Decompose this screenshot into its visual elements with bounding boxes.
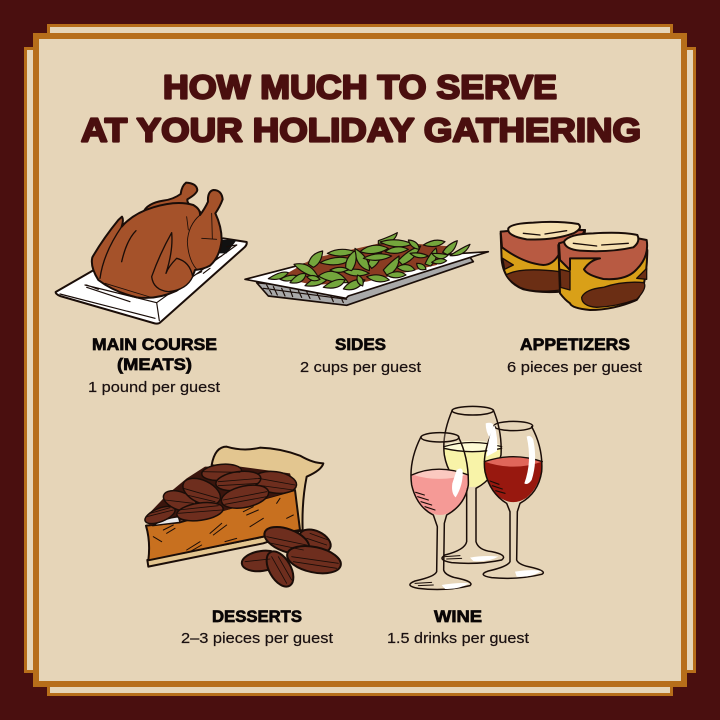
panel: appetizers [501, 222, 647, 376]
label: appetizers [507, 336, 642, 376]
title: HOW MUCH TO SERVE [163, 68, 557, 106]
label: desserts: DESSERTS [212, 608, 302, 626]
label: main course [88, 336, 220, 396]
icon: three wine glasses [410, 406, 543, 590]
white wine glass [442, 406, 504, 563]
icon: pecan pie slice [143, 447, 343, 591]
title [81, 68, 641, 148]
label: wine [387, 608, 529, 647]
panel: sides [245, 233, 488, 376]
icon: roast turkey on platter [56, 183, 247, 324]
label: desserts: 2–3 pieces per guest [181, 631, 333, 647]
label: wine: 1.5 drinks per guest [387, 631, 529, 647]
panel: desserts [143, 447, 343, 647]
label: wine: WINE [434, 608, 482, 626]
label: sides: SIDES [335, 336, 386, 354]
label: appetizers: APPETIZERS [520, 336, 630, 354]
label: main course: 1 pound per guest [88, 380, 220, 396]
label: sides [300, 336, 421, 376]
label: main course: MAIN COURSE [92, 336, 217, 354]
label: sides: 2 cups per guest [300, 360, 421, 376]
title: AT YOUR HOLIDAY GATHERING [81, 112, 641, 148]
icon: green beans on tray [245, 233, 488, 305]
label: main course: (MEATS) [117, 356, 192, 374]
panel: main course [56, 183, 247, 396]
red wine glass [483, 421, 543, 578]
panel: wine [387, 406, 543, 647]
icon: wrapped appetizer rolls [501, 222, 647, 310]
label: appetizers: 6 pieces per guest [507, 360, 642, 376]
label: desserts [181, 608, 333, 647]
rosé wine glass [410, 433, 471, 590]
